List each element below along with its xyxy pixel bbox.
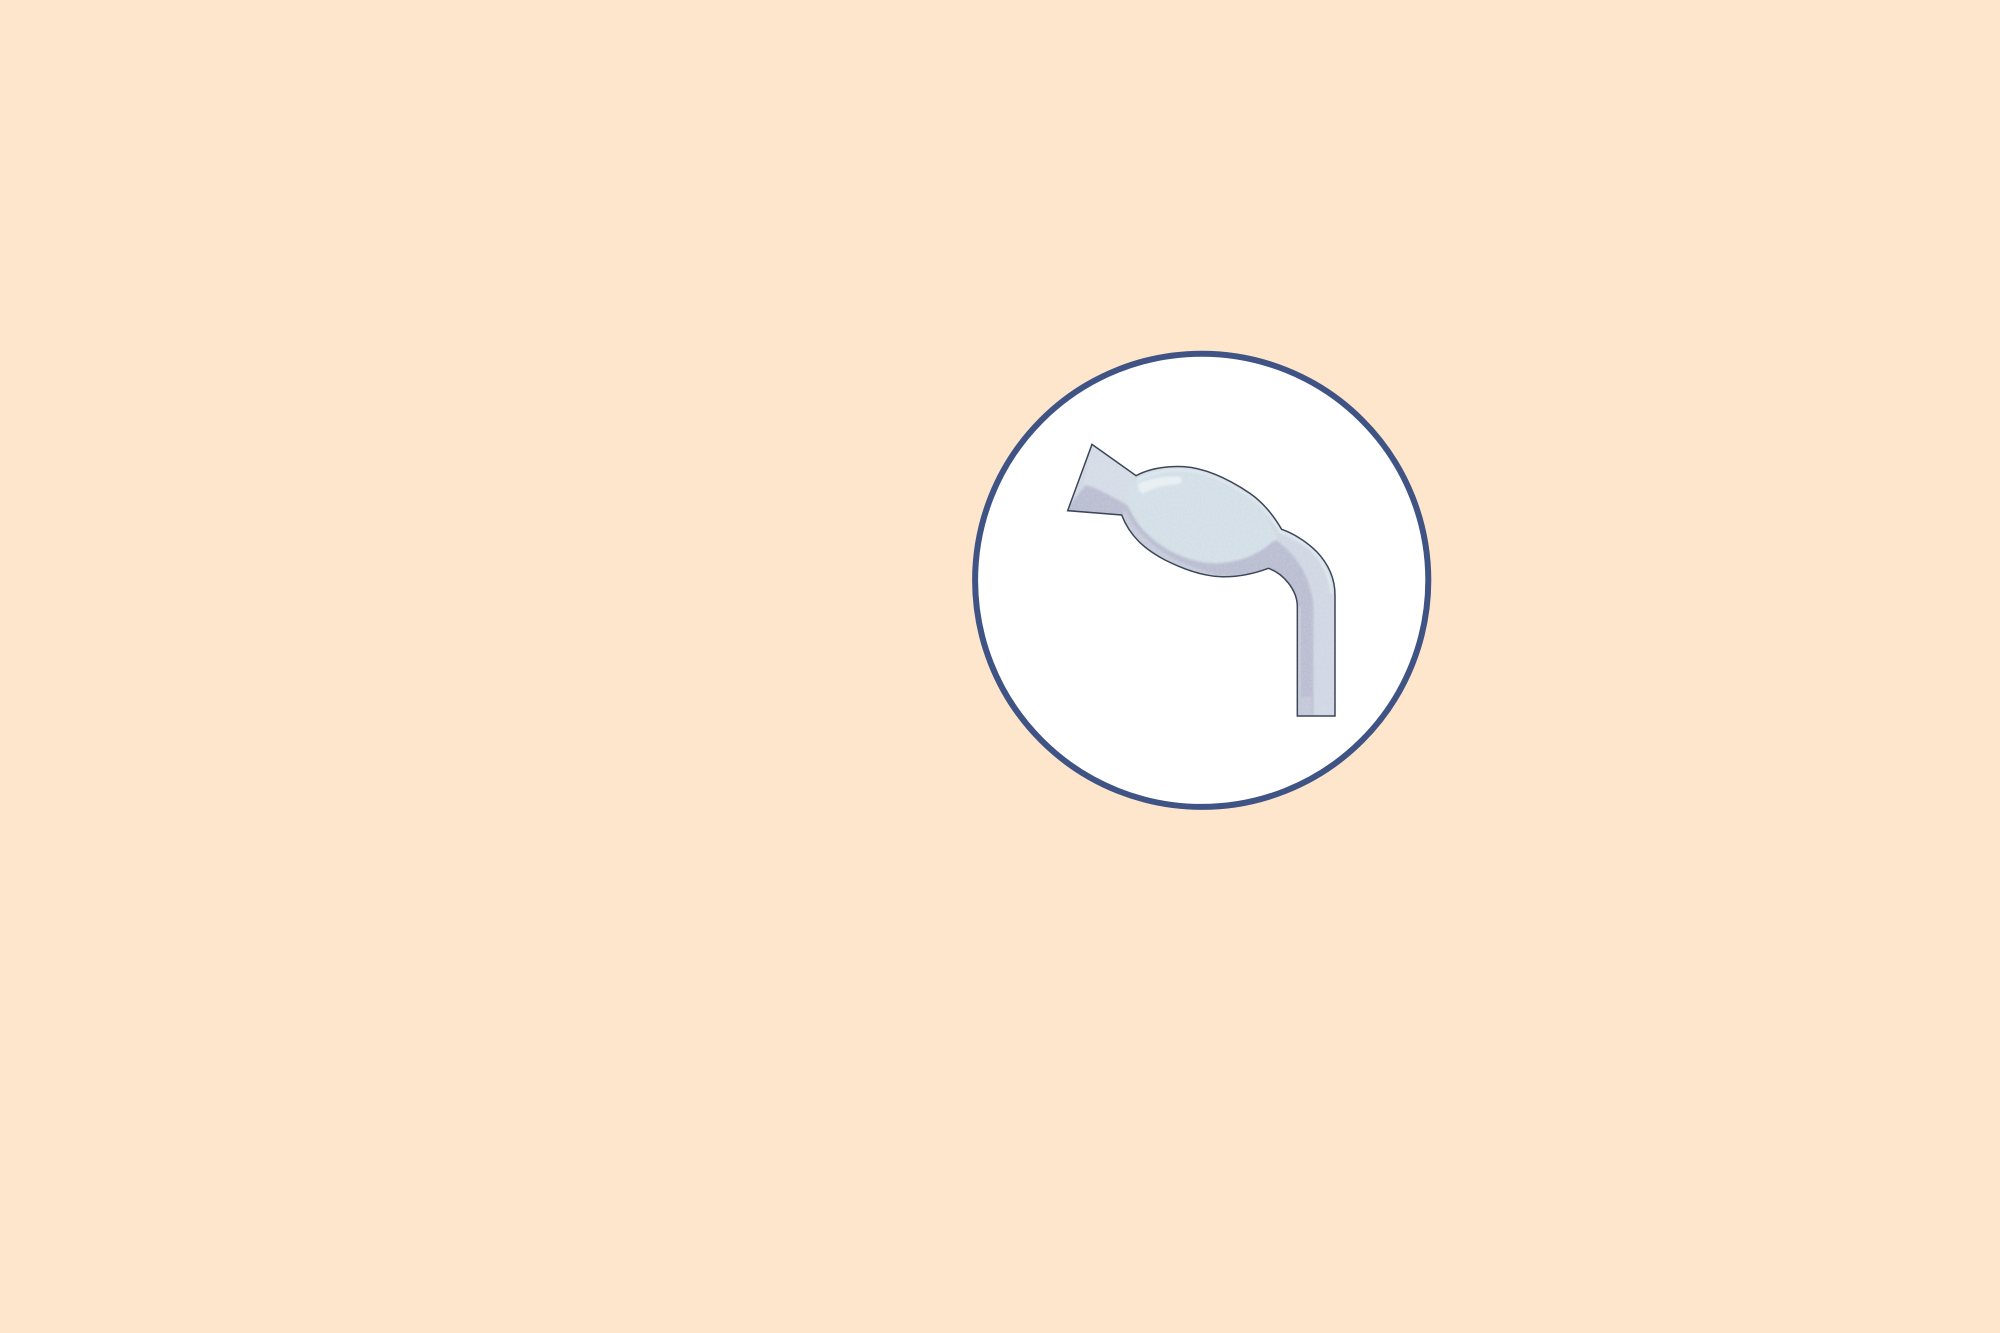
highlight [1138,477,1181,493]
grain texture [1079,488,1312,706]
illustration: tube bulb in circle [972,350,1432,810]
tube base of stem [1302,698,1311,715]
circle ring [975,354,1428,807]
flare light [1083,444,1136,505]
rim light [1137,470,1332,593]
tube left edge [1298,607,1300,715]
bulb and tube [1060,440,1340,723]
circle fill [976,354,1428,806]
band lower lighter edge [1122,512,1209,574]
base fill [1068,444,1335,716]
bulb body [1129,490,1275,564]
circle badge [975,354,1428,807]
lower shadow band [1063,485,1313,723]
outline stroke [1068,444,1335,716]
